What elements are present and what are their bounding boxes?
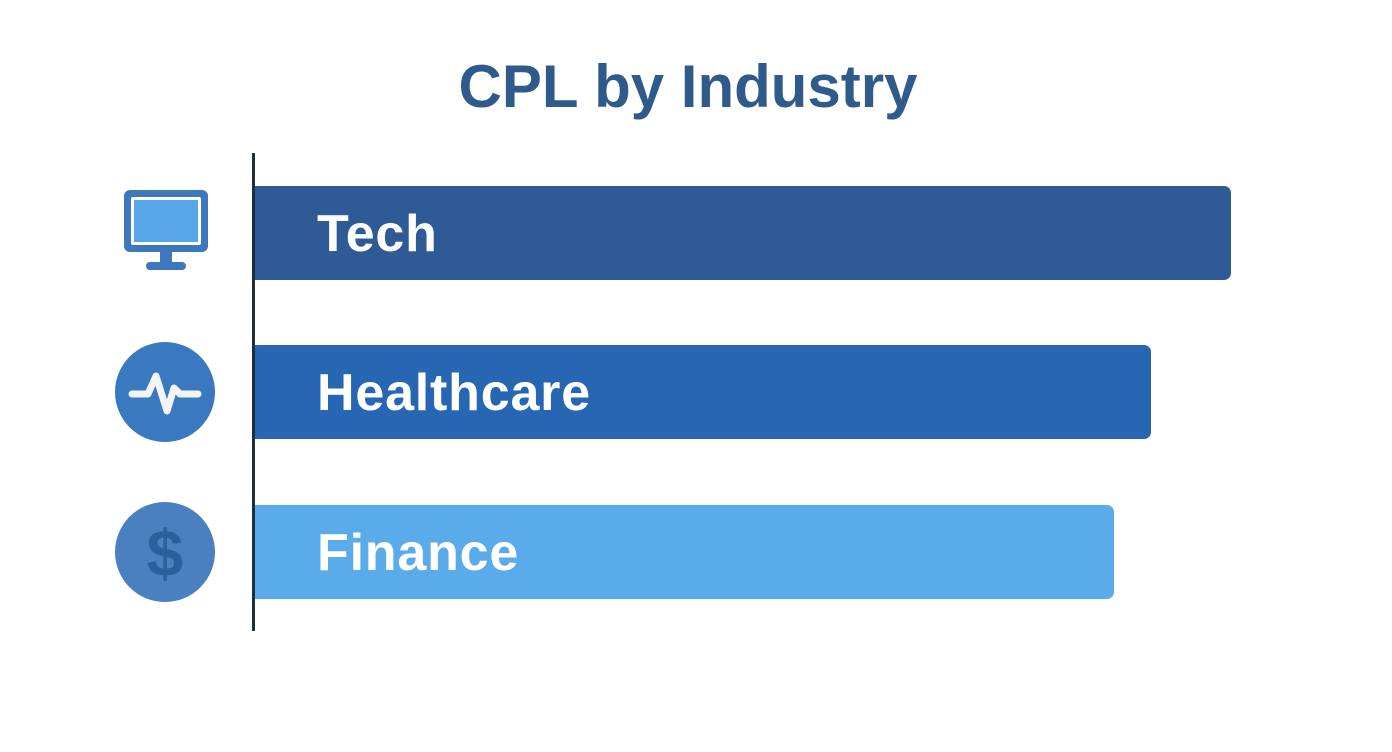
bar: Finance: Finance — [317, 524, 519, 582]
bar: Healthcare — [255, 345, 1151, 439]
icon: dollar: $ — [147, 516, 183, 590]
icon: dollar — [115, 502, 215, 602]
bar: Tech — [255, 186, 1231, 280]
axis line — [252, 153, 255, 631]
icon: monitor — [124, 190, 208, 270]
icon: heartbeat — [115, 342, 215, 442]
bar: Healthcare: Healthcare — [317, 364, 591, 422]
bar: Tech: Tech — [317, 205, 438, 263]
title: CPL by Industry — [459, 53, 917, 120]
bar: Finance — [255, 505, 1114, 599]
